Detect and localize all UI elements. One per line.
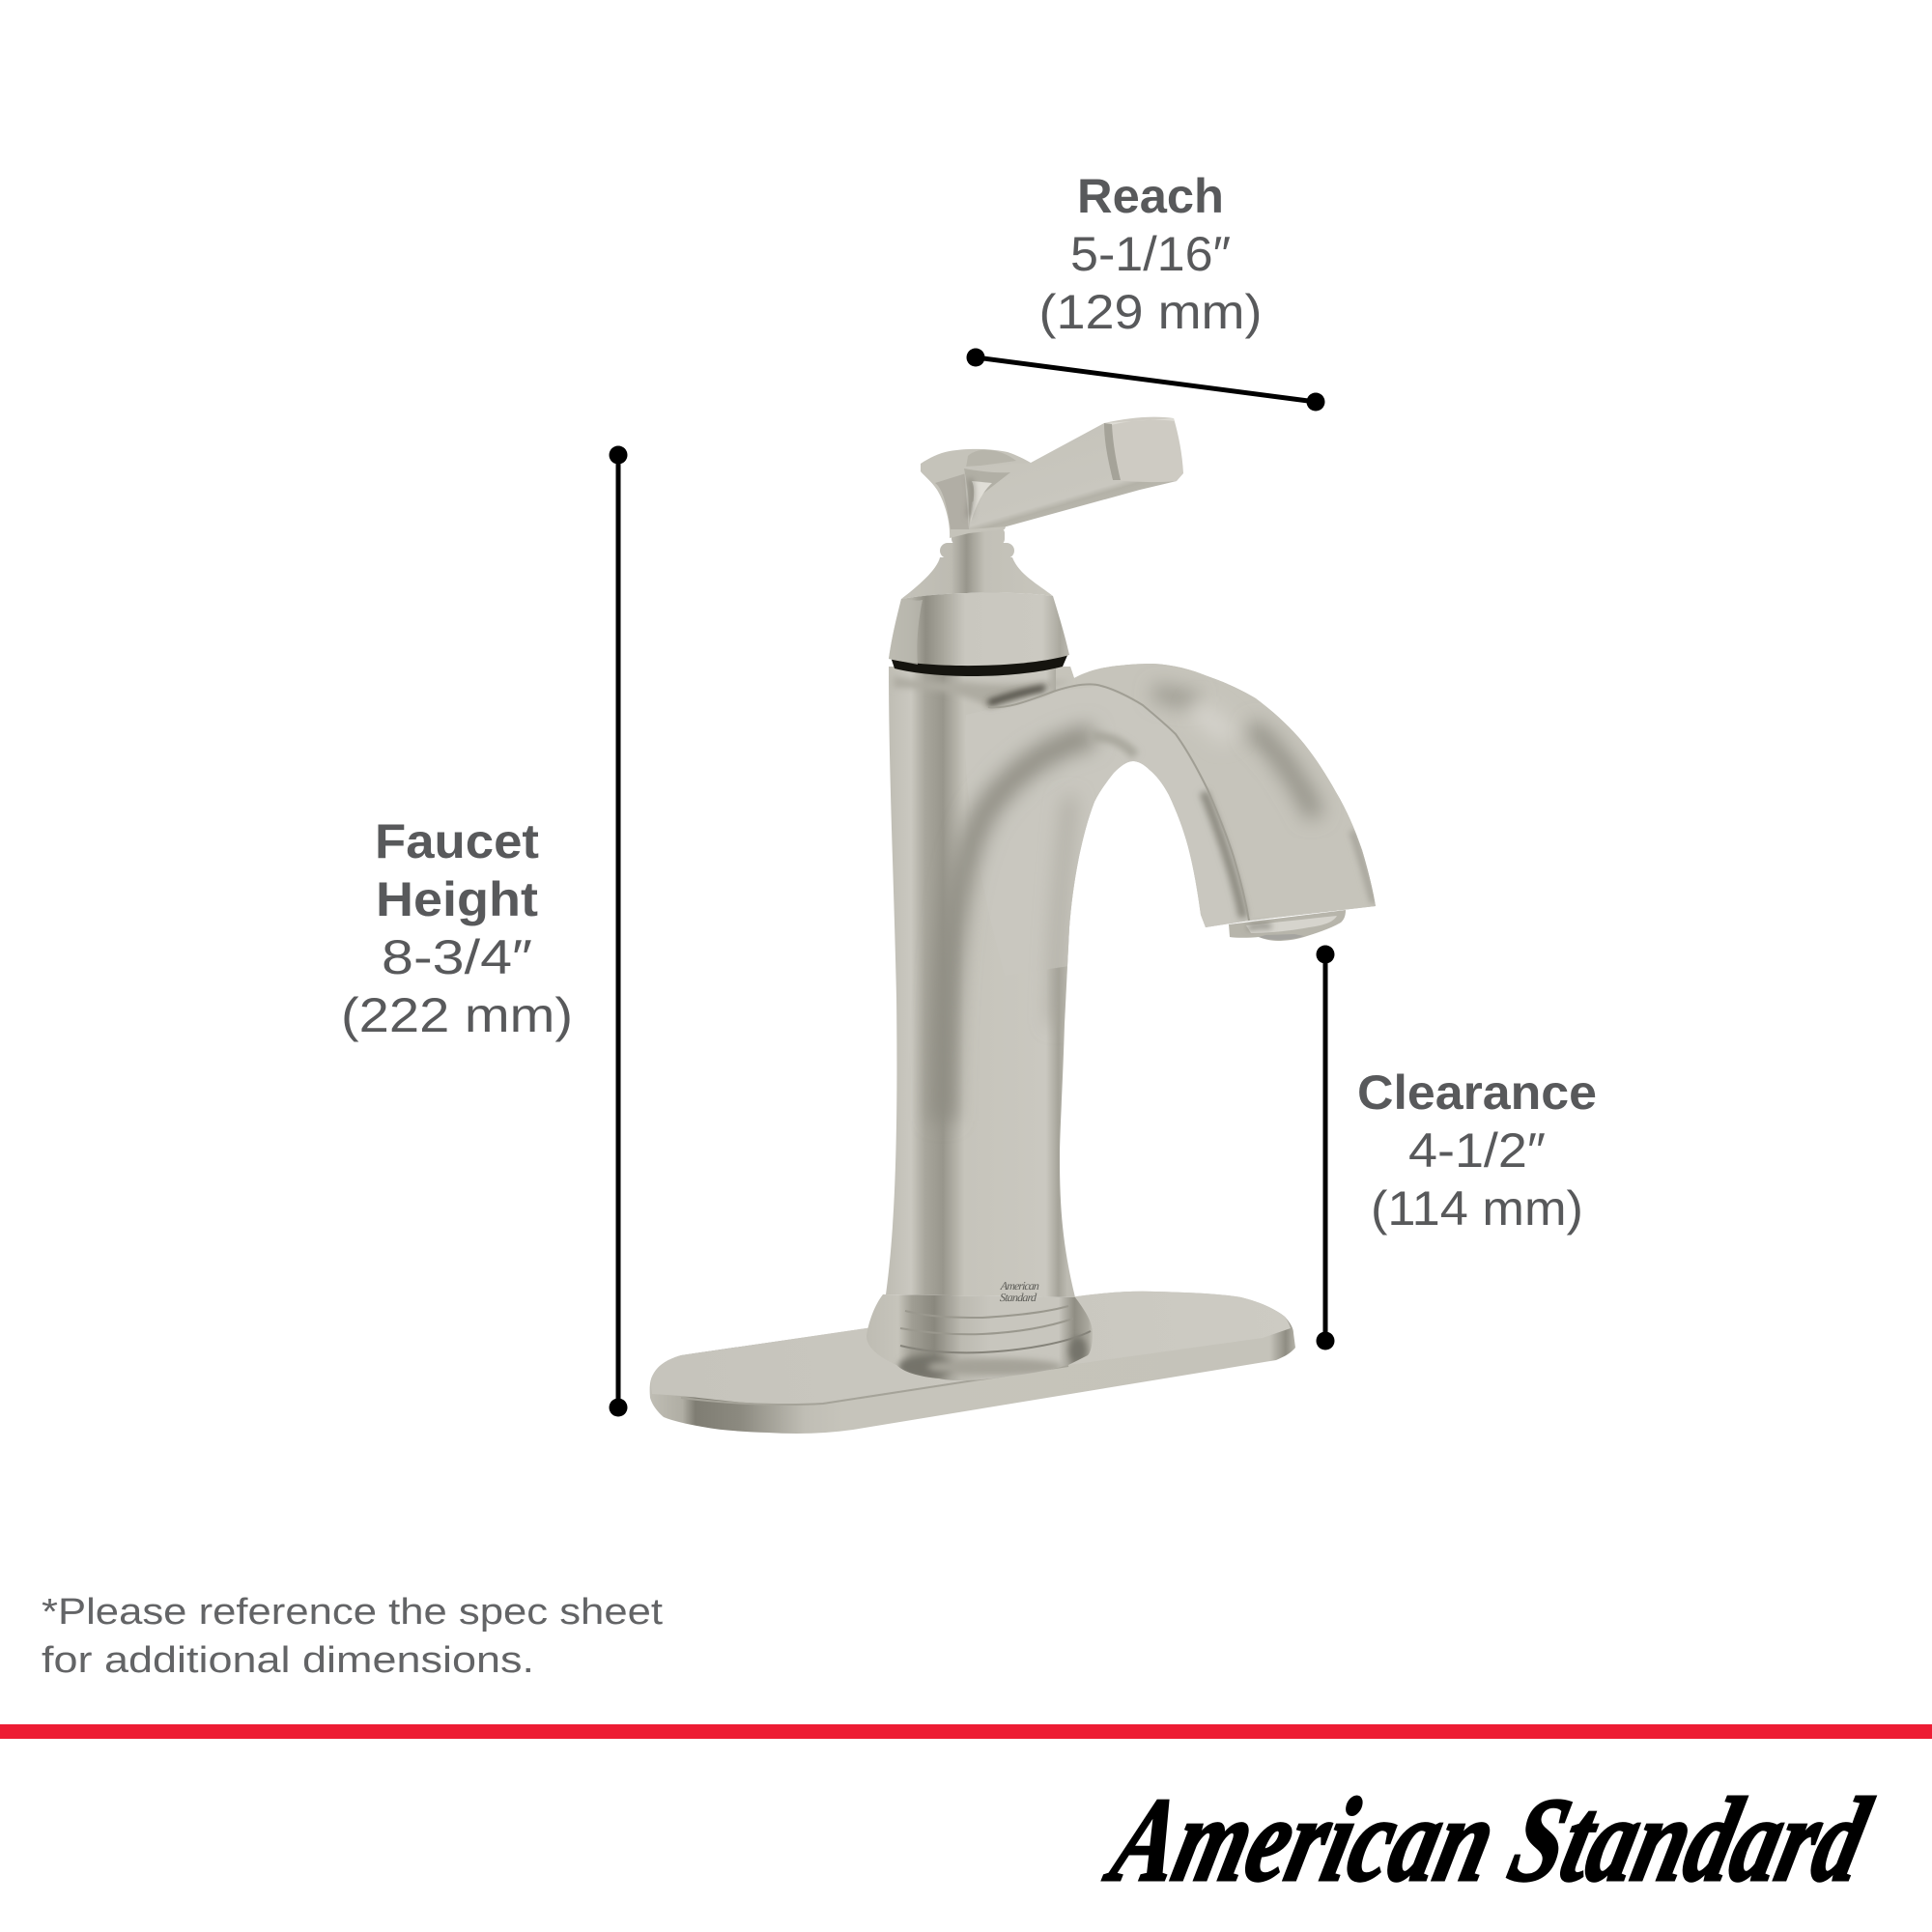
faucet body and spout (886, 657, 1381, 1297)
handle lever (921, 417, 1183, 538)
aerator (1229, 910, 1346, 941)
faucet height label: Height (376, 872, 538, 926)
footnote (42, 1592, 664, 1681)
engraved logo on body (999, 1279, 1039, 1304)
clearance dimension line (1316, 945, 1335, 1350)
reach dimension line (966, 348, 1325, 412)
footnote: for additional dimensions. (42, 1640, 534, 1681)
faucet height label: 8-3/4″ (382, 930, 532, 984)
faucet illustration (650, 417, 1381, 1434)
reach label: 5-1/16″ (1070, 227, 1231, 281)
handle collar (940, 527, 1014, 558)
footnote: *Please reference the spec sheet (42, 1592, 664, 1633)
clearance label: (114 mm) (1371, 1181, 1583, 1236)
deck plate (650, 1292, 1295, 1434)
base ring (867, 1294, 1093, 1380)
faucet height label: Faucet (375, 814, 539, 868)
clearance label (1357, 1065, 1597, 1236)
dark gap under handle cap (891, 653, 1068, 676)
red divider bar (0, 1724, 1932, 1739)
faucet height label: (222 mm) (341, 988, 573, 1042)
faucet height dimension line (609, 446, 628, 1416)
engraved logo on body: Standard (1000, 1291, 1038, 1304)
clearance label: Clearance (1357, 1065, 1597, 1120)
handle cap (889, 557, 1069, 666)
reach label: (129 mm) (1039, 285, 1262, 339)
reach label (1039, 169, 1262, 339)
clearance label: 4-1/2″ (1408, 1123, 1546, 1178)
reach label: Reach (1077, 169, 1224, 223)
engraved logo on body: American (999, 1279, 1039, 1293)
faucet height label (341, 814, 573, 1042)
